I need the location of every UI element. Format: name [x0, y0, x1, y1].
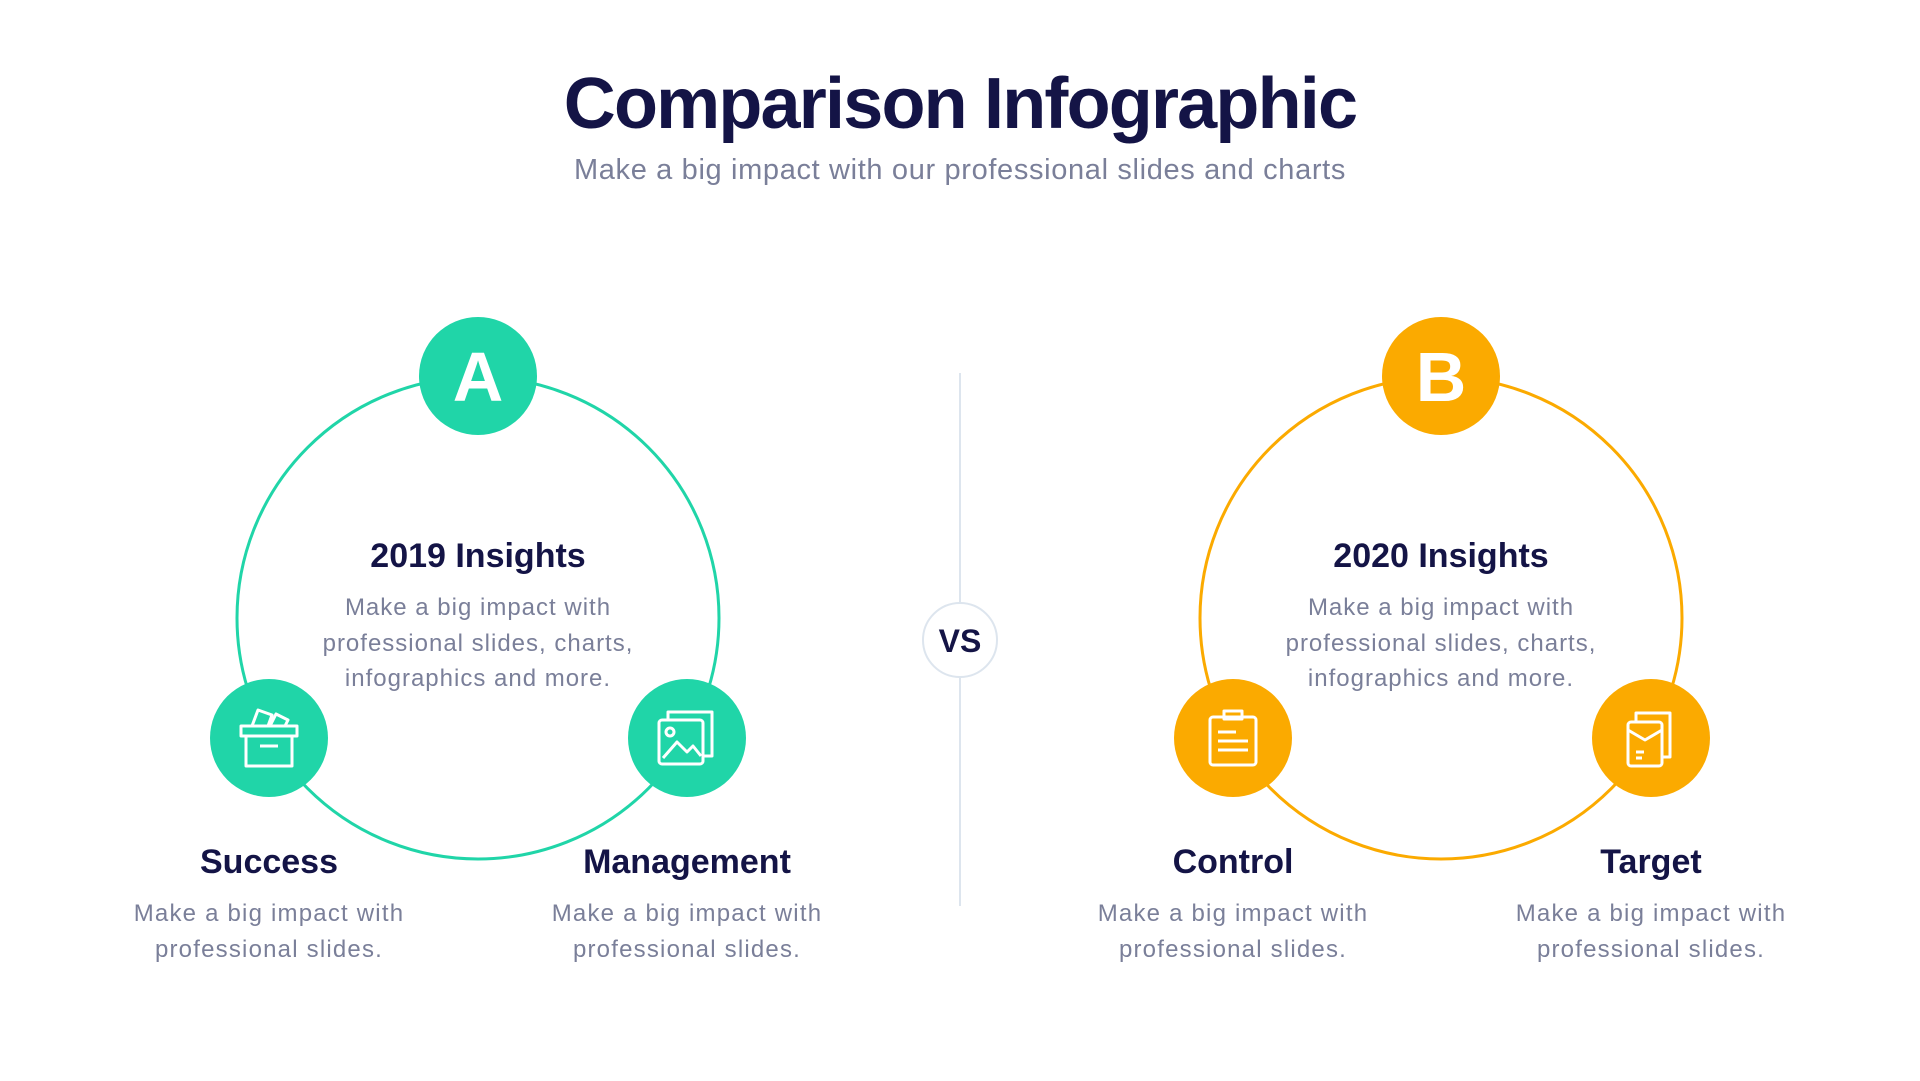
- text: A body: Make a big impact with: [345, 594, 611, 621]
- item: Control: professional slides.: [1119, 936, 1347, 963]
- item: Target: Make a big impact with: [1516, 900, 1786, 927]
- icon: documents: [1592, 679, 1710, 797]
- badge A: [419, 317, 537, 435]
- text: B body: infographics and more.: [1308, 665, 1574, 692]
- divider line with VS: VS: [939, 623, 981, 659]
- item: Management: professional slides.: [573, 936, 801, 963]
- text: B body: Make a big impact with: [1308, 594, 1574, 621]
- item: Success: professional slides.: [155, 936, 383, 963]
- icon: clipboard: [1174, 679, 1292, 797]
- item: Success: Make a big impact with: [134, 900, 404, 927]
- item: Control: Control: [1173, 843, 1293, 881]
- panel: B 2020: [1098, 317, 1786, 963]
- item: Management: [552, 843, 822, 963]
- title: Comparison Infographic: [564, 64, 1356, 144]
- item: Management: Make a big impact with: [552, 900, 822, 927]
- item: Management: Management: [583, 843, 791, 881]
- badge B: B: [1416, 338, 1466, 416]
- item: Target: [1516, 843, 1786, 963]
- item: Success: Success: [200, 843, 338, 881]
- badge A: A: [453, 338, 503, 416]
- panel: A 2019: [134, 317, 822, 963]
- divider line with VS: [923, 373, 997, 906]
- ring A: [237, 377, 719, 859]
- heading: 2019 Insights: 2019 Insights: [370, 537, 586, 575]
- text: A body: professional slides, charts,: [323, 630, 633, 657]
- item: Target: professional slides.: [1537, 936, 1765, 963]
- icon: images: [628, 679, 746, 797]
- text: B body: professional slides, charts,: [1286, 630, 1596, 657]
- subtitle: Make a big impact with our professional slides and charts: [574, 154, 1346, 186]
- badge B: [1382, 317, 1500, 435]
- item: Control: Make a big impact with: [1098, 900, 1368, 927]
- item: Control: [1098, 843, 1368, 963]
- icon: box: [210, 679, 328, 797]
- item: Success: [134, 843, 404, 963]
- ring B: [1200, 377, 1682, 859]
- text: A body: infographics and more.: [345, 665, 611, 692]
- item: Target: Target: [1600, 843, 1702, 881]
- heading: 2020 Insights: 2020 Insights: [1333, 537, 1549, 575]
